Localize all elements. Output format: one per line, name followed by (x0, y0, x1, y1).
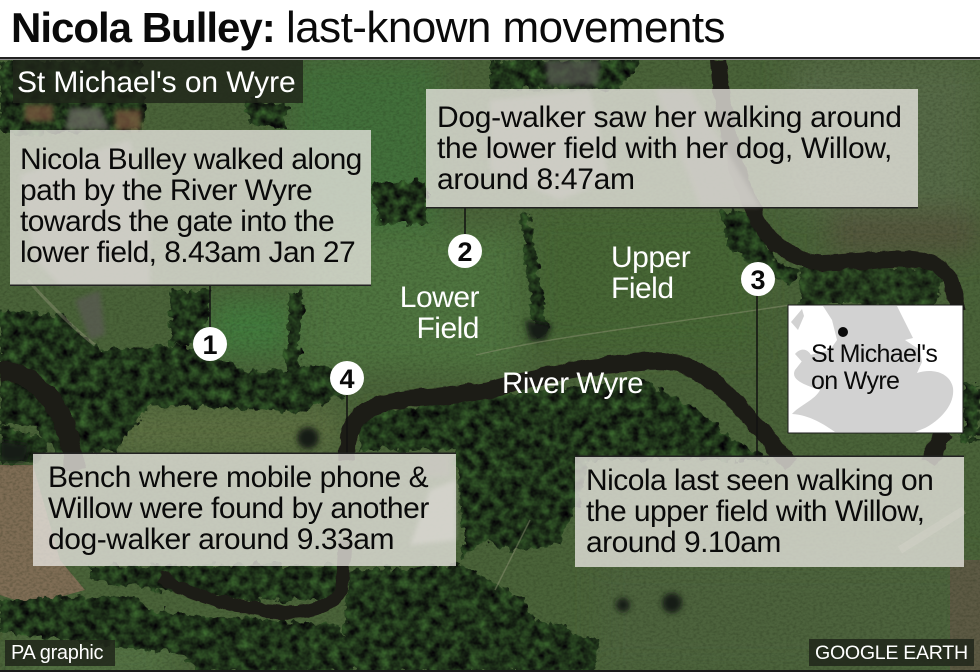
label: Upper Field: Field (611, 272, 674, 305)
location dot (838, 327, 848, 337)
ploughed plot (0, 465, 85, 605)
marker 2: 2 (457, 237, 473, 267)
label: River Wyre: River Wyre (502, 367, 643, 400)
callout 1: towards the gate into the (20, 205, 334, 238)
callout 2: the lower field with her dog, Willow, (437, 132, 892, 165)
rule under title (0, 57, 980, 60)
callout 3: the upper field with Willow, (586, 495, 924, 528)
callout 4: dog-walker around 9.33am (48, 523, 394, 556)
marker 2 (448, 234, 482, 268)
land shapes (792, 306, 953, 432)
marker 4 (330, 361, 364, 395)
callout 1: Nicola Bulley walked along (20, 143, 362, 176)
leader line 4 (346, 380, 348, 453)
callout 4: Bench where mobile phone & (48, 461, 429, 494)
marker 4: 4 (339, 364, 355, 394)
buildings: village top-left (20, 105, 150, 340)
label: Lower Field (400, 281, 480, 345)
callout 3: around 9.10am (586, 526, 781, 559)
label: Lower Field: Field (416, 312, 479, 345)
inset locator map: on Wyre (811, 367, 899, 395)
callout 2: Dog-walker saw her walking around (437, 101, 902, 134)
label: Upper Field: Upper (611, 241, 691, 274)
marker 3 (741, 262, 775, 296)
bottom rule (0, 670, 980, 672)
buildings: top centre and farm (410, 60, 760, 545)
callout 2 (426, 89, 918, 208)
callout 4 (33, 452, 456, 566)
paths (28, 280, 964, 590)
callout 1: path by the River Wyre (20, 174, 312, 207)
location label: St Michael's on Wyre (17, 66, 296, 99)
title: last-known movements (286, 3, 725, 52)
callout 3: Nicola last seen walking on (586, 464, 933, 497)
inset locator map (788, 305, 963, 433)
label: Lower Field: Lower (400, 281, 480, 314)
credit: PA graphic: PA graphic (11, 642, 104, 664)
credit: Google Earth: GOOGLE EARTH (815, 642, 968, 664)
title (11, 3, 725, 52)
label: Upper Field (611, 241, 691, 305)
callout 2: around 8:47am (437, 163, 635, 196)
marker 3: 3 (750, 265, 766, 295)
callout 1 (10, 130, 371, 286)
inset locator map: St Michael's (811, 340, 937, 368)
leader line 3 (756, 280, 758, 456)
callout 1: lower field, 8.43am Jan 27 (20, 236, 355, 269)
leader line 2 (464, 208, 466, 250)
callout 4: Willow were found by another (48, 492, 429, 525)
leader line 1 (209, 286, 211, 345)
marker 1: 1 (202, 330, 218, 360)
shaded tree clumps (0, 320, 682, 613)
marker 1 (193, 327, 227, 361)
callout 3 (575, 456, 964, 567)
title: Nicola Bulley: (11, 4, 275, 51)
